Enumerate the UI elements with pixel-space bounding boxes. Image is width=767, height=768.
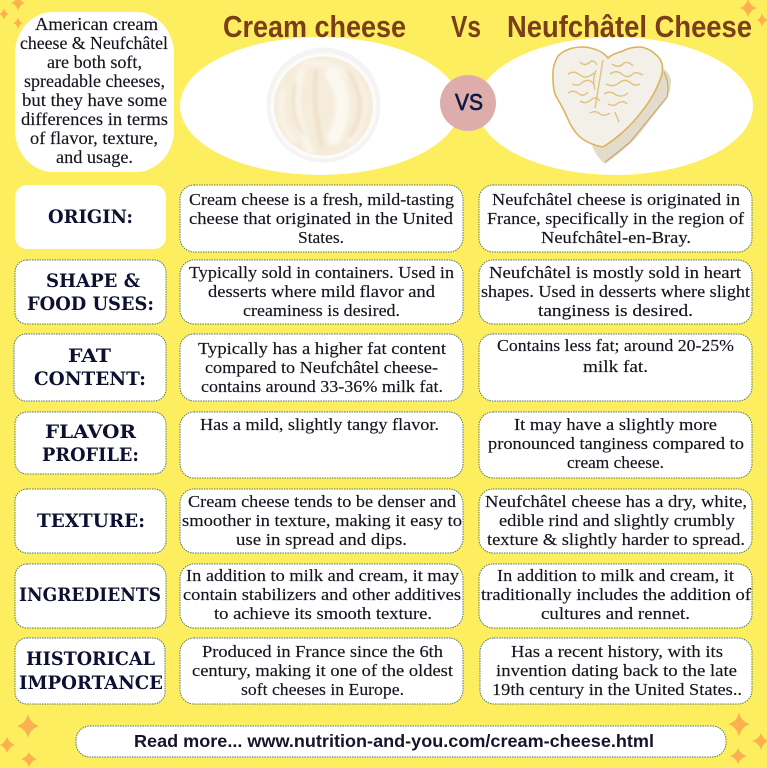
- intro text panel: and usage.: [56, 147, 133, 167]
- label: ingredients: INGREDIENTS: [19, 584, 161, 606]
- neufchatel flavor: pronounced tanginess compared to: [488, 434, 744, 453]
- neufchatel ingredients: In addition to milk and cream, it: [497, 566, 734, 585]
- neufchatel history: [480, 638, 752, 704]
- label: shape and food uses: FOOD USES:: [27, 293, 154, 315]
- label: historical importance: IMPORTANCE: [19, 672, 163, 694]
- intro text panel: differences in terms: [21, 109, 168, 129]
- label: fat content: [14, 334, 166, 401]
- neufchatel origin: [479, 185, 752, 252]
- label: historical importance: HISTORICAL: [26, 648, 155, 670]
- neufchatel ingredients: traditionally includes the addition of: [481, 585, 751, 604]
- neufchatel image panel: [477, 37, 753, 175]
- icon: sparkles top left: [0, 0, 25, 29]
- neufchatel fat: milk fat.: [583, 357, 648, 376]
- cream cheese fat: [180, 334, 463, 401]
- intro text panel: [15, 12, 174, 172]
- cream cheese origin: Cream cheese is a fresh, mild-tasting: [189, 190, 455, 209]
- label: fat content: FAT: [68, 345, 111, 367]
- neufchatel history: invention dating back to the late: [496, 661, 737, 680]
- cream cheese history: [180, 638, 463, 704]
- label: texture: [15, 489, 166, 553]
- cream cheese ingredients: contain stabilizers and other additives: [183, 585, 461, 604]
- label: origin: ORIGIN:: [48, 206, 133, 228]
- intro text panel: cheese & Neufchâtel: [20, 33, 168, 53]
- neufchatel origin: France, specifically in the region of: [487, 209, 744, 228]
- neufchatel ingredients: cultures and rennet.: [541, 604, 690, 623]
- cream cheese ingredients: [180, 564, 463, 628]
- neufchatel flavor: [479, 412, 752, 478]
- row: fat content: [14, 334, 752, 401]
- neufchatel flavor: cream cheese.: [567, 453, 664, 472]
- icon: heart-shaped cheese: [553, 47, 671, 164]
- cream cheese image panel: [180, 37, 460, 175]
- neufchatel flavor: It may have a slightly more: [514, 415, 717, 434]
- cream cheese shape: [180, 260, 463, 324]
- footer link: [76, 726, 726, 757]
- cream cheese fat: compared to Neufchâtel cheese-: [205, 358, 438, 377]
- neufchatel shape: tanginess is desired.: [538, 301, 693, 320]
- cream cheese texture: Cream cheese tends to be denser and: [188, 492, 457, 511]
- label: origin: [15, 185, 166, 249]
- neufchatel shape: [479, 260, 752, 324]
- cream cheese texture: [180, 489, 463, 553]
- icon: bowl of cream cheese: [266, 48, 380, 162]
- cream cheese history: century, making it one of the oldest: [192, 661, 453, 680]
- row: ingredients: [15, 564, 752, 628]
- intro text panel: of flavor, texture,: [30, 128, 158, 148]
- label: texture: TEXTURE:: [37, 510, 145, 532]
- label: historical importance: [15, 638, 165, 704]
- cream cheese history: Produced in France since the 6th: [202, 642, 444, 661]
- row: origin: [15, 185, 752, 252]
- cream cheese origin: [180, 185, 463, 252]
- footer link: Read more... www.nutrition-and-you.com/cream-cheese.html: [134, 731, 654, 751]
- label: flavor profile: PROFILE:: [42, 444, 139, 466]
- cream cheese history: soft cheeses in Europe.: [241, 680, 404, 699]
- neufchatel history: 19th century in the United States..: [492, 680, 742, 699]
- icon: sparkles bottom left: [0, 714, 39, 767]
- icon: sparkles bottom right: [728, 712, 767, 764]
- neufchatel shape: Neufchâtel is mostly sold in heart: [489, 263, 741, 282]
- label: flavor profile: FLAVOR: [45, 421, 136, 443]
- intro text panel: but they have some: [22, 90, 167, 110]
- title: cream cheese: Cream cheese: [223, 9, 406, 44]
- icon: sparkles top right: [740, 0, 767, 27]
- cream cheese fat: contains around 33-36% milk fat.: [201, 377, 443, 396]
- cream cheese origin: cheese that originated in the United: [189, 209, 454, 228]
- neufchatel fat: [479, 334, 752, 401]
- title: vs: Vs: [451, 9, 481, 44]
- label: ingredients: [15, 564, 166, 628]
- cream cheese shape: creaminess is desired.: [243, 301, 400, 320]
- neufchatel history: Has a recent history, with its: [511, 642, 723, 661]
- cream cheese ingredients: to achieve its smooth texture.: [214, 604, 432, 623]
- neufchatel texture: Neufchâtel cheese has a dry, white,: [485, 492, 747, 511]
- cream cheese ingredients: In addition to milk and cream, it may: [186, 566, 460, 585]
- neufchatel shape: shapes. Used in desserts where slight: [481, 282, 750, 301]
- label: shape and food uses: SHAPE &: [46, 270, 140, 292]
- neufchatel fat: Contains less fat; around 20-25%: [497, 336, 734, 355]
- cream cheese fat: Typically has a higher fat content: [198, 339, 446, 358]
- label: fat content: CONTENT:: [34, 368, 146, 390]
- neufchatel texture: texture & slightly harder to spread.: [487, 530, 745, 549]
- row: texture: [15, 489, 752, 553]
- cream cheese shape: Typically sold in containers. Used in: [189, 263, 455, 282]
- neufchatel ingredients: [479, 564, 752, 628]
- neufchatel texture: [479, 489, 752, 553]
- neufchatel origin: Neufchâtel-en-Bray.: [541, 228, 691, 247]
- cream cheese shape: desserts where mild flavor and: [208, 282, 436, 301]
- neufchatel texture: edible rind and slightly crumbly: [499, 511, 736, 530]
- label: shape and food uses: [15, 260, 166, 324]
- cream cheese texture: smoother in texture, making it easy to: [182, 511, 462, 530]
- vs badge: VS: [455, 89, 483, 115]
- cream cheese flavor: Has a mild, slightly tangy flavor.: [200, 415, 439, 434]
- row: shape and food uses: [15, 260, 752, 324]
- intro text panel: American cream: [35, 14, 158, 34]
- neufchatel origin: Neufchâtel cheese is originated in: [492, 190, 741, 209]
- label: flavor profile: [15, 412, 166, 474]
- row: flavor profile: [15, 412, 752, 478]
- cream cheese origin: States.: [298, 228, 344, 247]
- cream cheese flavor: [180, 412, 463, 478]
- intro text panel: spreadable cheeses,: [24, 71, 165, 91]
- cream cheese texture: use in spread and dips.: [236, 530, 407, 549]
- intro text panel: are both soft,: [47, 52, 142, 72]
- row: historical importance: [15, 638, 752, 704]
- vs badge: [440, 75, 496, 131]
